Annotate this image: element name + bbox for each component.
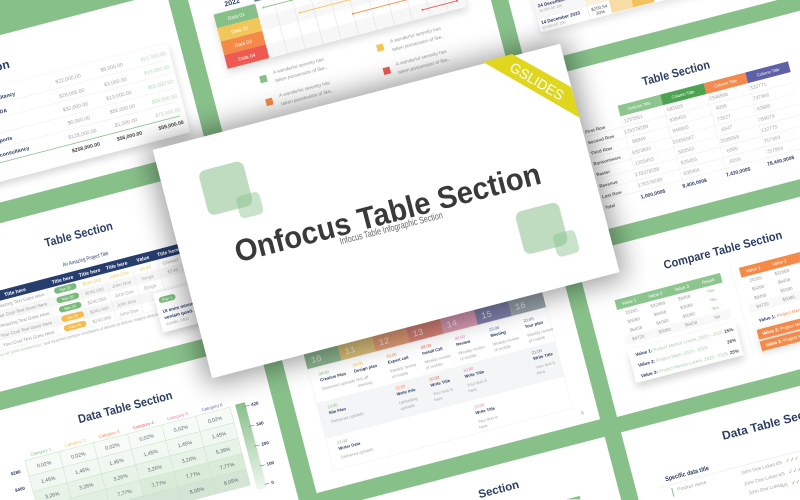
gantt row labels: Data 01: [227, 12, 246, 22]
compare table: orange: $5080: [782, 294, 796, 302]
heatmap grid: 7,77%: [185, 471, 201, 480]
data rows: 1205453: [634, 156, 655, 167]
heatmap grid: 1,45%: [40, 475, 57, 485]
table rows: $240.000: [82, 277, 102, 287]
table rows: 05:44: [139, 264, 152, 272]
schedule grid: of mobile: [391, 370, 409, 379]
schedule grid: Tour plan: [524, 320, 544, 329]
table rows: John Doe: [109, 270, 130, 280]
compare table: orange: $5080: [751, 284, 765, 292]
budget card: $1,000.00: [114, 117, 138, 129]
data rows: 1,000,000$: [640, 189, 666, 201]
schedule grid: uploads: [400, 403, 415, 411]
data rows: 757959: [766, 145, 784, 156]
compare table: orange: $32089: [774, 268, 790, 277]
callout card: Ut enim minim ad: [162, 299, 201, 314]
colour scale bar: 100: [266, 460, 275, 467]
data rows: 32455567: [672, 134, 695, 146]
callout card: [153, 283, 206, 333]
schedule grid: meeting: [357, 379, 373, 388]
schedule grid: Write Title: [533, 351, 554, 361]
heatmap grid: 1,45%: [75, 467, 91, 476]
specific data table: [657, 442, 800, 500]
row labels: [10, 469, 26, 493]
budget card: [0, 43, 190, 208]
slide: calendar table top right: [526, 0, 793, 37]
heatmap grid: 7,77%: [219, 462, 236, 472]
value summary: green: [628, 322, 744, 383]
data rows: Total: [604, 203, 616, 210]
callout card: Amirthi, CEO: [165, 316, 189, 327]
table rows: Dorge: [143, 283, 157, 291]
data rows: 4099: [715, 103, 728, 112]
slide heading: Table Section: [43, 219, 114, 250]
gantt row labels: [214, 4, 269, 69]
table header bar: Title here: [78, 267, 101, 279]
schedule card: 10:000 AE 200: [542, 20, 566, 30]
main cover slide: [153, 44, 620, 378]
budget card: $6,000.00: [67, 115, 91, 127]
heatmap grid: 3,26%: [113, 473, 129, 483]
slide heading: Data Table Section: [76, 388, 174, 426]
compare table: green: $5080: [682, 311, 696, 319]
gantt grid: [253, 0, 467, 58]
compare table: green: [615, 273, 732, 345]
schedule grid: Write Title: [475, 405, 496, 415]
table rows: John Doe: [116, 298, 137, 308]
slide: gantt timeline top middle: [207, 0, 480, 118]
heatmap grid: 3,26%: [147, 464, 163, 474]
data rows: 789079: [758, 114, 776, 124]
table rows: Feb 20: [69, 323, 81, 330]
legend: A wonderful serenity has: [395, 49, 448, 68]
GSLIDES ribbon: [483, 54, 580, 118]
category labels: Category 6: [201, 402, 224, 412]
schedule grid: Expert call: [387, 355, 409, 365]
compare table: orange: $6458: [754, 292, 767, 300]
table rows: John Doe: [114, 289, 135, 299]
table rows: $240.560: [92, 315, 112, 324]
column headers: Column Title: [627, 100, 652, 111]
compare table: green: 20265: [625, 307, 639, 315]
colour scale bar: 340: [256, 420, 265, 427]
heatmap grid: 5,39%: [215, 446, 232, 456]
value summary: green: Value 1: Project Mentor Lorem, 2020 - 2025: [635, 330, 723, 357]
data rows: 178378289: [637, 177, 663, 189]
schedule grid: Your text is: [466, 378, 487, 388]
data rows: First Row: [585, 125, 606, 135]
GSLIDES ribbon: GSLIDES: [507, 59, 567, 103]
data rows: 6547: [721, 125, 733, 133]
heatmap grid: 0,02%: [105, 442, 121, 452]
data rows: 838459: [669, 114, 687, 124]
slide: specific data bottom right: [649, 407, 800, 500]
table header bar: Title here: [51, 275, 74, 286]
compare table: orange: $4720: [756, 301, 770, 309]
data rows: 132775: [761, 124, 778, 134]
heatmap grid: 8,05%: [223, 477, 240, 487]
schedule grid: [308, 307, 575, 471]
data rows: 8,400,000$: [682, 178, 708, 190]
table header bar: Value: [136, 255, 150, 264]
specific data table: ✓✓✓: [785, 455, 800, 465]
schedule grid: Your text is: [477, 414, 498, 424]
table rows: $240.000: [89, 305, 110, 315]
slide: project table left: [0, 196, 228, 385]
data rows: 128378289: [623, 124, 649, 136]
compare table: green: $6458: [653, 309, 667, 317]
schedule grid: Write Title: [430, 378, 451, 388]
table rows: Dorge: [141, 273, 155, 281]
heatmap grid: 1,45%: [177, 440, 193, 449]
colour scale bar: 420: [251, 400, 260, 407]
schedule card: 10:000 AE 200: [539, 4, 563, 13]
budget card: $38,000.00: [151, 94, 178, 106]
schedule grid: 40:00: [386, 351, 398, 359]
specific data table: 4/5: [778, 471, 786, 479]
schedule grid: of mobile: [459, 352, 478, 362]
schedule grid: Delivered uploads: [322, 378, 355, 391]
compare table: orange: $6458: [777, 277, 791, 285]
category labels: [30, 402, 224, 457]
heatmap grid: 3,26%: [79, 482, 95, 492]
schedule grid: 23:00: [352, 360, 364, 368]
schedule grid: 10:00: [428, 374, 440, 382]
row labels: $280: [10, 469, 22, 476]
schedule grid: of mobile: [494, 343, 512, 353]
legend: A wonderful serenity has: [279, 80, 331, 99]
data rows: Revenue: [599, 179, 619, 189]
data rows: 737956: [752, 92, 770, 102]
data rows: Second Row: [587, 134, 615, 145]
compare table: orange: Value 1: [745, 265, 762, 274]
table rows: Your Cool Text Goes Here: [0, 320, 53, 338]
heatmap grid: 0,02%: [173, 424, 189, 434]
specific data table: 4/5: [781, 482, 789, 490]
budget card: $21,000.00: [140, 51, 167, 63]
compare table: green: Value 3: [674, 284, 690, 292]
table rows: Nov 20: [62, 295, 74, 302]
slide heading: Compare Table Section: [662, 228, 784, 272]
schedule grid: 20:00: [523, 316, 535, 323]
budget card: $59,000.00: [158, 120, 185, 132]
schedule day headers: 12: [378, 336, 391, 348]
schedule grid: 23:00: [336, 438, 348, 445]
slide: compare table right: [607, 224, 800, 388]
compare table: green: Value 2: [648, 290, 664, 299]
specific data table: John Doe Lukas: [748, 482, 784, 497]
table header bar: Title here: [157, 247, 180, 258]
slide heading: Table Section: [641, 57, 711, 88]
compare table: green: No: [714, 314, 721, 320]
schedule grid: Meeting: [490, 329, 507, 338]
schedule grid: of mobile: [528, 334, 546, 344]
schedule grid: Weekly review: [526, 326, 555, 338]
data rows: 8303892: [632, 146, 652, 156]
compare table: green: $3089: [680, 302, 694, 310]
compare table: green: $6458: [684, 320, 698, 328]
compare table: orange: 20265: [749, 275, 763, 283]
slide: table section right: [575, 38, 800, 212]
schedule grid: Weekly review: [390, 362, 418, 374]
schedule grid: Design plan: [353, 363, 378, 374]
cover title: Onfocus Table Section: [231, 156, 544, 269]
schedule grid: Weekly review: [424, 353, 452, 365]
decorative squares: bottom right: [514, 199, 580, 265]
data rows: Raster: [596, 169, 611, 177]
data rows: 73527: [717, 114, 732, 123]
schedule grid: Uploading: [398, 396, 418, 405]
schedule grid: here: [468, 386, 478, 393]
schedule card: 30%: [595, 9, 606, 16]
schedule grid: here: [434, 395, 444, 402]
table header bar: Title here: [4, 287, 27, 298]
column headers: Column Title: [714, 78, 738, 89]
value summary: green: Value 2: Project Mark, 2020 - 2025: [638, 345, 708, 368]
schedule grid: Delivered uploads: [330, 411, 364, 424]
specific data table: John Doe Lukas: [743, 473, 779, 487]
schedule grid: Site Plan: [328, 406, 347, 415]
specific data table: Specific data title: [665, 465, 710, 483]
schedule grid: 10:00: [473, 402, 485, 410]
budget card: $128,000.00: [68, 128, 97, 141]
legend: A wonderful serenity has: [389, 26, 442, 45]
colour scale bar: [235, 399, 280, 490]
slide: data heatmap bottom left: [0, 367, 280, 500]
data rows: 88849: [632, 136, 647, 145]
table rows: $T46: [167, 267, 179, 275]
schedule grid: Review: [456, 338, 472, 347]
specific data table: Product name: [677, 480, 707, 493]
data rows: 6995: [726, 146, 739, 155]
colour scale bar: 200: [261, 440, 270, 447]
legend: taken possession of like..: [397, 57, 451, 76]
gantt row labels: Data 04: [238, 52, 256, 63]
compare table: green: Yes: [706, 287, 716, 294]
heatmap grid: 0,02%: [207, 415, 223, 425]
cover subtitle: Infocus Table Infographic Section: [339, 210, 444, 247]
data rows: 2598058: [720, 134, 740, 145]
compare table: orange: $5080: [780, 286, 794, 294]
schedule grid: Your text is: [432, 387, 453, 397]
schedule grid: 09:00: [318, 369, 330, 377]
value summary: orange: [754, 306, 800, 351]
heatmap grid: 0,02%: [139, 433, 155, 443]
data rows: 838456: [683, 167, 701, 177]
specific data table: John Doe Lukas: [741, 462, 776, 476]
category labels: Category 3: [98, 429, 120, 439]
data rows: 178378289: [634, 166, 660, 178]
schedule grid: 21:00: [531, 348, 543, 355]
specific data table: 4/5: [775, 460, 783, 467]
budget card: $32,000.00: [62, 101, 89, 114]
colour scale bar: 0: [271, 479, 275, 485]
schedule grid: 09:00: [454, 334, 466, 341]
data rows: Third Row: [590, 145, 613, 156]
data rows: Ransomware: [593, 155, 622, 167]
heatmap grid: 1,45%: [211, 431, 227, 441]
category labels: Category 4: [132, 420, 155, 430]
decorative squares: top left: [198, 158, 264, 227]
budget card: $19,000.00: [144, 65, 170, 77]
compare table: green: $6458: [629, 325, 643, 333]
table rows: $240.560: [87, 296, 107, 306]
table subtitle: An Amazing Project Title: [62, 251, 109, 269]
schedule grid: Weekly review: [458, 344, 486, 356]
compare table: green: Value 1: [621, 297, 637, 306]
legend: taken possession of like..: [281, 88, 334, 107]
value summary: green: Value 3: Project Mentor Lorem, 2020 - 2025: [640, 351, 729, 378]
compare table: green: $5080: [658, 327, 672, 335]
budget card: $75,000.00: [155, 107, 181, 119]
category labels: Category 2: [64, 438, 87, 448]
table rows: [0, 246, 221, 356]
schedule grid: Delivered uploads: [340, 446, 374, 460]
budget card: $55,000.00: [147, 79, 174, 91]
data rows: 63885: [756, 103, 772, 113]
schedule grid: Your text is: [535, 360, 556, 370]
data rows: Last Row: [601, 190, 623, 200]
compare table: green: $6458: [678, 294, 691, 302]
slide: bottom middle partial: [477, 465, 581, 500]
schedule day headers: 16: [514, 300, 527, 313]
heatmap grid: 7,77%: [117, 489, 133, 498]
schedule grid: Weekly review: [492, 335, 520, 347]
schedule day headers: 14: [445, 318, 458, 331]
schedule card: $200,54: [591, 3, 608, 12]
heatmap grid: 8,05%: [189, 486, 205, 496]
compare table: green: $5080: [627, 316, 641, 324]
schedule grid: Creative Plan: [320, 371, 347, 382]
column headers: Column Title: [756, 67, 781, 78]
compare table: green: Yes: [711, 305, 720, 312]
data rows: 78,400,000$: [767, 155, 795, 168]
value summary: green: 25%: [724, 327, 734, 334]
schedule day headers: 11: [344, 345, 357, 357]
gantt row labels: Data 02: [231, 25, 249, 36]
table rows: Jan 20: [67, 314, 79, 320]
schedule grid: Writer Data: [338, 440, 361, 451]
table rows: John Doe: [111, 279, 132, 289]
schedule grid: 14:00: [327, 402, 339, 410]
compare table: green: $32089: [650, 300, 666, 309]
slide: budget table top left: [0, 17, 191, 212]
data rows: 7,430,000$: [725, 166, 751, 179]
budget card: $56,000.00: [109, 103, 136, 116]
slide: weekly schedule bottom middle: [299, 271, 585, 480]
heatmap grid: 7,77%: [151, 480, 167, 489]
data rows: 757959: [763, 135, 781, 145]
table header bar: Title here: [105, 260, 129, 272]
compare table: green: $4720: [632, 333, 645, 342]
schedule grid: 12:00: [395, 383, 407, 391]
schedule grid: 10:00: [462, 366, 475, 373]
table rows: Nov 20: [64, 304, 77, 311]
data rows: 848900: [672, 125, 690, 135]
schedule grid: here: [536, 369, 546, 376]
callout card: veniam quod.: [164, 308, 194, 320]
schedule card: [526, 0, 792, 33]
legend: [258, 26, 451, 111]
data rows: 2348998: [708, 92, 729, 102]
budget card: $13,000.00: [106, 90, 132, 102]
data rows: 332771: [749, 82, 767, 92]
compare table: green: Result: [701, 277, 716, 285]
data rows: 6099: [729, 156, 742, 165]
value summary: green: 25%: [729, 348, 739, 355]
budget card: $3,000.00: [104, 77, 128, 88]
budget card: $56,000.00: [116, 131, 143, 143]
data rows: 583505: [666, 103, 684, 113]
data rows: [584, 72, 800, 212]
schedule day headers: [299, 273, 546, 369]
legend: A wonderful serenity has: [272, 57, 325, 76]
value summary: green: 28%: [727, 338, 737, 345]
heatmap grid: 3,26%: [181, 455, 197, 465]
column headers: [618, 61, 791, 116]
table rows: $240.000: [85, 286, 105, 296]
compare table: green: $5080: [656, 318, 670, 326]
schedule grid: of mobile: [425, 361, 444, 370]
heatmap grid: 1,45%: [109, 458, 125, 467]
table rows: Apr 20: [60, 285, 71, 292]
page number: 8: [581, 410, 585, 416]
schedule day headers: 10: [310, 354, 323, 366]
budget card: $8,000.00: [100, 62, 124, 74]
heatmap grid: 0,02%: [36, 460, 53, 470]
category labels: Category 1: [30, 447, 52, 457]
table rows: John Doe: [119, 307, 140, 317]
schedule day headers: 15: [480, 309, 493, 322]
schedule grid: Not off: [356, 374, 370, 382]
schedule grid: Install Call: [422, 346, 443, 356]
schedule grid: Write Info: [396, 387, 416, 397]
budget card: $28,000.00: [59, 88, 85, 100]
compare table: green: Yes: [709, 296, 718, 303]
row labels: $400: [14, 485, 26, 493]
budget card: $22,000.00: [55, 73, 82, 86]
heatmap grid: 1,45%: [143, 449, 159, 458]
schedule day headers: 13: [411, 327, 424, 340]
schedule grid: Write Title: [464, 369, 485, 379]
schedule grid: 09:00: [420, 342, 432, 350]
data rows: 583502: [677, 146, 695, 156]
legend: taken possession of like..: [392, 34, 445, 53]
table header bar: [0, 237, 209, 307]
budget card: $258,000.00: [71, 142, 101, 155]
heatmap grid: 0,02%: [71, 451, 87, 461]
gantt row labels: Data 03: [234, 39, 253, 49]
table rows: Your Cool Text Goes Here: [2, 329, 55, 348]
compare table: orange: [739, 252, 800, 313]
legend: taken possession of like..: [275, 65, 328, 84]
table rows: Contact: [162, 257, 179, 266]
schedule grid: 23:00: [488, 325, 500, 332]
schedule card: 14 December 2023: [541, 10, 581, 25]
callout card: Plan 1: [162, 296, 173, 302]
category labels: Category 5: [167, 411, 189, 421]
data rows: 1203551: [623, 114, 644, 125]
compare table: orange: Value 2: [771, 258, 788, 267]
column headers: Column Title: [671, 89, 695, 100]
data rows: 826455: [680, 156, 698, 167]
heatmap grid: [25, 407, 250, 500]
schedule grid: here: [479, 423, 489, 430]
